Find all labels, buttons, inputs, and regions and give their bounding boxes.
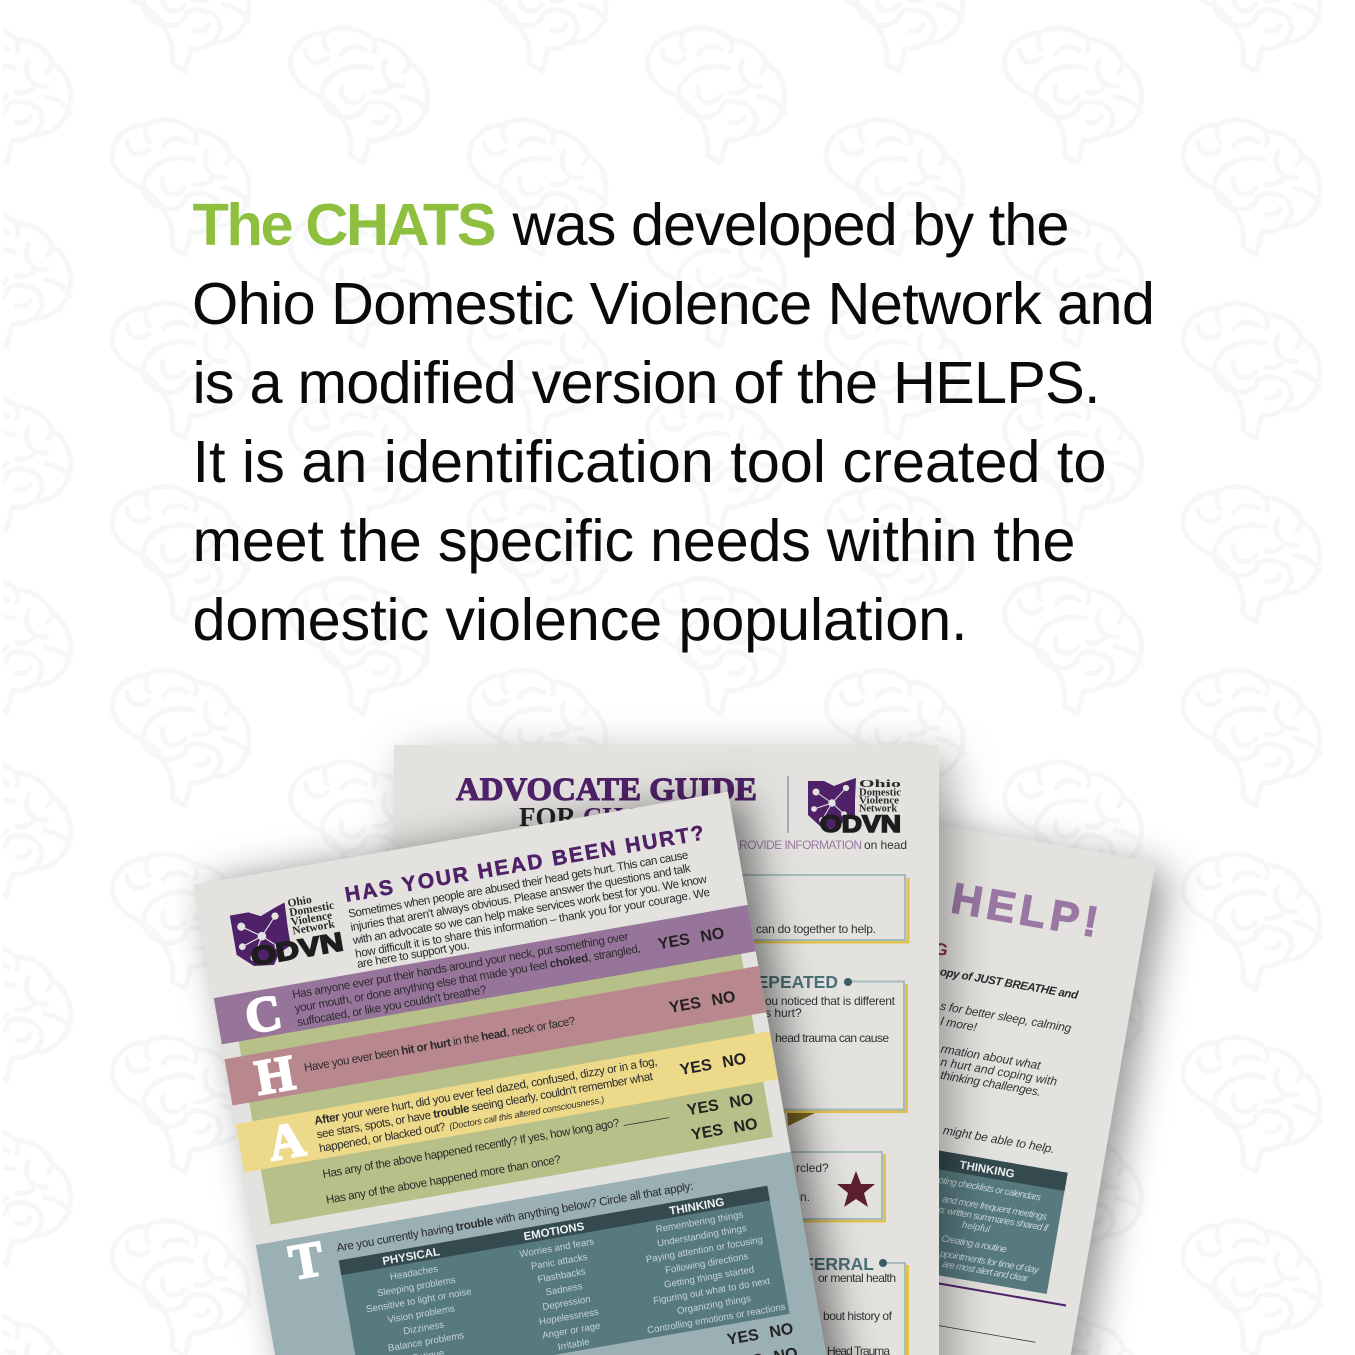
logo: ODVN: Violence [859,796,900,806]
questions: recency: NO [728,1091,755,1112]
green question block [237,942,773,1225]
band: C choked: suffocated, or like you couldn't breathe? [296,983,488,1029]
intro text: with an advocate so we can help make services work best for you. We know [351,873,708,947]
list: thinking: Understanding things [656,1223,748,1249]
sheet: back Advocate Guide page [394,745,939,1355]
help text lines: n hurt and coping with [940,1055,1059,1089]
list: thinking: Getting things started [663,1264,755,1291]
intro text: are here to support you. [356,938,471,971]
band: T trouble: NO [768,1321,795,1341]
icon: star [837,1171,875,1207]
band: A altered: see stars, spots, or have trouble seeing clearly, couldn't remember what [316,1070,655,1141]
list: thinking: Remembering things [655,1209,744,1235]
panel: thinking strategies: helpful [961,1220,992,1235]
box: repeated: head trauma can cause [775,1031,889,1045]
list: physical: Sensitive to light or noise [365,1286,472,1315]
intro paragraph: domestic violence population. [192,586,968,653]
list: thinking: Paying attention or focusing [645,1234,764,1266]
list: physical [361,1259,482,1355]
help text lines: opy of JUST BREATHE and [939,966,1080,1002]
questions: recency: YES [686,1097,721,1119]
list: emotions: Sadness [545,1281,584,1298]
band: A altered: YES [679,1057,713,1079]
band: T trouble [255,1147,853,1355]
logo: ODVN: Violence [290,910,333,929]
band: C choked [213,901,757,1049]
logo: ODVN: Ohio [287,894,313,910]
panel: thinking strategies: pting checklists or calendars [937,1175,1042,1204]
help text lines: l more! [939,1014,979,1034]
panel: symptoms table [339,1186,790,1355]
questions: recency: Has any of the above happened more than once? [325,1153,562,1207]
band: H hit: NO [710,989,737,1009]
logo: ODVN: ODVN [249,926,345,972]
arrow wedge [787,1113,815,1126]
box: referral: or mental health [818,1271,896,1285]
band: T trouble: YES [726,1326,761,1349]
questions: recency [320,1091,759,1208]
panel: symptoms table: EMOTIONS [523,1221,586,1243]
intro text: Sometimes when people are abused their head gets hurt. This can cause [347,849,689,921]
help text lines: thinking challenges. [939,1068,1042,1099]
band: H hit: YES [668,995,703,1017]
list: emotions: Hopelessness [538,1307,600,1328]
list: emotions: Depression [542,1294,591,1313]
intro line: ROVIDE INFORMATION [739,838,862,852]
logo: ODVN [229,890,345,974]
box: repeated: REPEATED [744,972,838,992]
logo: ODVN: Network [859,804,897,814]
list: emotions: Panic attacks [530,1252,589,1272]
panel: thinking strategies [825,1135,1068,1294]
list: emotions: Irritable [557,1337,590,1353]
rule lines [846,1269,1066,1346]
panel: thinking strategies: ppointments for time of day [938,1248,1041,1276]
box: circled star [430,1152,884,1221]
logo: ODVN: Network [291,918,336,937]
list: thinking: Figuring out what to do next [652,1276,771,1307]
band: T trouble: T [285,1230,327,1291]
questions: recency: Has any of the above happened recently? If yes, how long ago? [322,1116,621,1181]
title: HAS YOUR HEAD BEEN HURT? [343,822,706,907]
panel: thinking strategies: and more frequent meetings [941,1194,1048,1223]
logo: ODVN: Domestic [859,788,902,798]
intro paragraph: It is an identification tool created to [192,428,1106,495]
list: thinking: Organizing things [676,1293,752,1317]
band: A altered: happened, or blacked out? [318,1120,447,1155]
band: A altered [235,1028,779,1176]
band: A altered: (Doctors call this altered consciousness.) [448,1095,605,1131]
box: circled star: rcled? [796,1161,829,1175]
band: T trouble: Are you currently having trouble with anything below? Circle all that apply: [335,1180,694,1255]
heading: HELP!: HELP! [948,874,1102,947]
list: thinking [630,1205,787,1336]
panel: thinking strategies: are most alert and clear [941,1259,1030,1285]
box: talk together [430,875,908,942]
logo: ODVN [808,778,902,838]
help text lines: rmation about what [940,1042,1042,1073]
list: thinking: Following directions [664,1251,749,1276]
intro paragraph: is a modified version of the HELPS. [192,349,1100,416]
band: H hit: Have you ever been hit or hurt in the head, neck or face? [303,1014,577,1075]
logo: ODVN: Domestic [288,900,335,919]
box: repeated: ou noticed that is different [765,994,896,1008]
box: referral: bout history of [823,1309,893,1323]
logo: ODVN: Ohio [859,779,901,790]
band: C choked: Has anyone ever put their hands around your neck, put something over [291,930,630,1001]
intro text: injuries that aren't always obvious. Please answer the questions and talk [350,862,692,934]
subtitle: for CHATS: FOR CHATS [519,802,674,832]
band: A altered: After your were hurt, did you ever feel dazed, confused, dizzy or in a fog, [313,1055,658,1128]
help text lines: might be able to help. [942,1123,1056,1156]
band: C choked: C [241,983,286,1045]
help text lines [912,966,1082,1156]
list: physical: Vision problems [387,1303,456,1326]
box: referral [803,1254,908,1355]
panel: thinking strategies: THINKING [959,1159,1015,1181]
list: emotions: Anger or rage [541,1321,601,1342]
band: H hit [224,962,767,1110]
panel: thinking strategies: p: written summaries shared if [937,1204,1050,1234]
box: repeated: s hurt? [765,1006,802,1020]
intro text: how difficult it is to share this information – thank you for your courage. We [354,886,711,961]
intro paragraph: Ohio Domestic Violence Network and [192,270,1155,337]
help text lines: s for better sleep, calming [939,999,1073,1035]
band: C choked: your mouth, or done anything else that made you feel choked, strangled, [294,942,642,1015]
list: emotions: Flashbacks [537,1266,587,1286]
sheet: front CHATS screening page [193,792,853,1355]
list: physical: Balance problems [387,1330,465,1354]
band: A altered: NO [721,1051,748,1071]
divider [787,776,789,833]
intro text [346,846,713,971]
intro paragraph [192,191,1155,653]
list: physical: Sleeping problems [376,1275,457,1299]
panel: symptoms table: PHYSICAL [382,1246,441,1268]
panel: thinking strategies: Creating a routine [941,1233,1008,1255]
title: Advocate Guide: ADVOCATE GUIDE [456,772,757,808]
panel: symptoms table: THINKING [668,1196,725,1218]
band: C choked: NO [699,925,726,946]
box: repeated [430,972,906,1112]
intro paragraph: meet the specific needs within the [192,507,1076,574]
list: emotions: Worries and fears [519,1236,595,1260]
intro paragraph: was developed by the [512,191,1070,258]
list: physical: Headaches [389,1264,439,1283]
sheet: back Advocate Guide page: on head [864,838,907,852]
list: physical: Dizziness [403,1319,445,1337]
list: emotions [519,1236,612,1355]
logo: ODVN: ODVN [820,811,901,838]
box: talk together: can do together to help. [756,922,876,936]
heading fragment: G [933,939,949,960]
band: A altered: A [264,1110,309,1171]
questions: recency: YES [690,1122,725,1144]
band: C choked: YES [657,931,692,953]
questions: recency: NO [732,1116,759,1137]
list: thinking: Controlling emotions or reactions [646,1301,787,1336]
intro paragraph: The CHATS [192,191,496,258]
sheet: right HELP page [686,805,1156,1355]
band: H hit: H [251,1044,299,1106]
box: circled star: n. [800,1190,810,1204]
box: referral: FERRAL [803,1254,874,1274]
